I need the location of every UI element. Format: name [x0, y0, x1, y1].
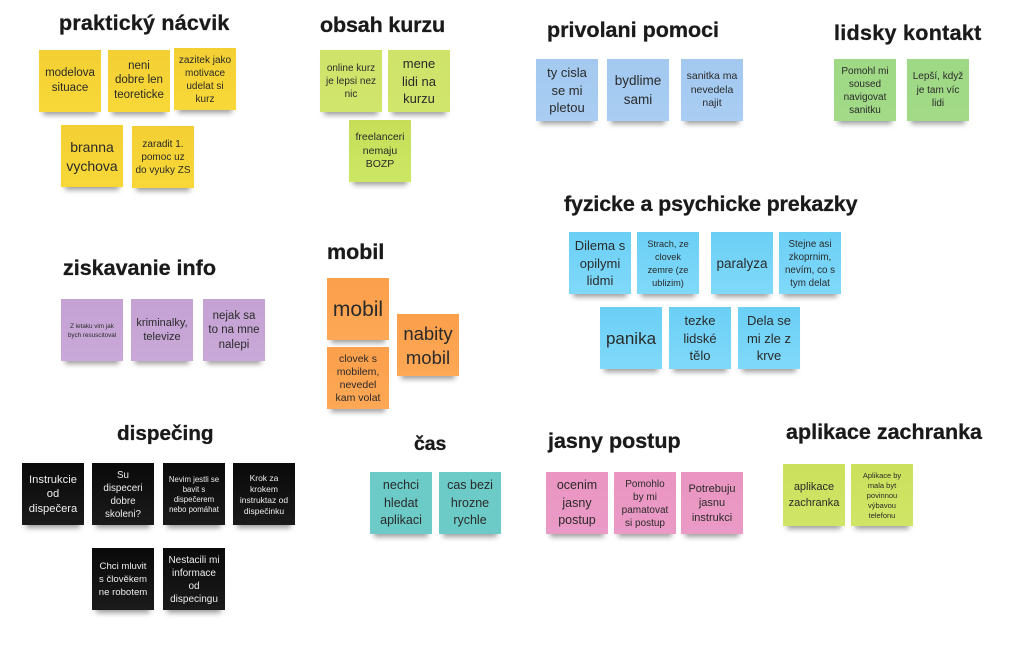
note: Strach, ze clovek zemre: Strach, ze: [647, 238, 689, 248]
note: Krok za krokem: dispečinku: [244, 506, 284, 516]
note: Instrukcie od dispečera: od: [47, 488, 59, 500]
note: Z letaku vim jak: Z letaku vim jak: [70, 322, 114, 330]
note: online kurz: nic: [345, 89, 357, 100]
note: Dilema s opilymi lidmi: [569, 232, 631, 294]
note: ocenim jasny postup: [546, 472, 608, 534]
note: mobil: [327, 278, 389, 340]
note: Pomohlo by mi pamatovat: [614, 472, 676, 534]
note: aplikace zachranka: [783, 464, 845, 526]
note: mene lidi na kurzu: lidi na: [402, 74, 436, 89]
note: panika: panika: [606, 328, 656, 348]
note: Pomohl mi soused: navigovat: [844, 92, 886, 102]
note: kriminalky, televize: televize: [143, 330, 181, 342]
note: Dela se mi zle z krve: mi zle z: [747, 331, 791, 346]
note: Stejne asi zkoprnim: tym delat: [790, 278, 830, 288]
note: Potrebuju jasnu instrukci: [681, 472, 743, 534]
note: Dela se mi zle z krve: krve: [757, 348, 781, 363]
note: modelova situace: situace: [52, 82, 88, 94]
title: privolani pomoci: privolani pomoci: [547, 18, 719, 42]
note: Pomohlo by mi pamatovat: si postup: [625, 518, 665, 528]
note: Strach, ze clovek zemre: [637, 232, 699, 294]
note: Nestacili mi informace: informace: [172, 568, 216, 578]
note: tezke lidské tělo: lidské: [683, 331, 717, 346]
note: Pomohlo by mi pamatovat: by mi: [633, 492, 657, 502]
note: sanitka ma nevedela najit: najit: [702, 97, 722, 109]
note: nabity mobil: mobil: [406, 346, 450, 368]
note: bydlime sami: sami: [624, 92, 652, 106]
note: ty cisla se mi pletou: se mi: [551, 83, 583, 98]
note: cas bezi hrozne rychle: rychle: [453, 513, 487, 527]
title: fyzicke a psychicke prekazky: fyzicke a psychicke prekazky: [564, 192, 857, 216]
note: Potrebuju jasnu instrukci: instrukci: [692, 512, 732, 524]
note: zazitek jako motivace: [174, 48, 236, 110]
note: nabity mobil: nabity: [403, 322, 453, 344]
note: modelova situace: modelova: [45, 67, 95, 79]
note: Su dispeceri dobre skoleni?: [92, 463, 154, 525]
note: modelova situace: [39, 50, 101, 112]
note: Dela se mi zle z krve: Dela se: [747, 313, 791, 328]
note: branna vychova: branna: [70, 138, 114, 154]
note: Potrebuju jasnu instrukci: jasnu: [699, 497, 725, 509]
note: Nevim jestli se bavit: dispečerem: [174, 494, 214, 504]
note: sanitka ma nevedela najit: [681, 59, 743, 121]
note: Lepší, když je tam víc lidi: lidi: [932, 98, 944, 109]
note: Dela se mi zle z krve: [738, 307, 800, 369]
note: Pomohlo by mi pamatovat: pamatovat: [622, 504, 668, 516]
note: clovek s mobilem: [327, 347, 389, 409]
note: kriminalky, televize: [131, 299, 193, 361]
note: freelanceri nemaju BOZP: BOZP: [366, 158, 394, 170]
note: Pomohlo by mi pamatovat: Pomohlo: [625, 478, 665, 490]
note: branna vychova: vychova: [66, 158, 118, 174]
note: Su dispeceri dobre skoleni?: skoleni?: [105, 508, 141, 520]
note: Nevim jestli se bavit: nebo pomáhat: [169, 504, 219, 514]
note: Chci mluvit s člověkem: Chci mluvit: [100, 561, 146, 572]
note: branna vychova: [61, 125, 123, 187]
note: Krok za krokem: Krok za: [250, 472, 278, 482]
note: Instrukcie od dispečera: [22, 463, 84, 525]
note: ocenim jasny postup: postup: [558, 513, 596, 527]
note: nabity mobil: [397, 314, 459, 376]
note: Nestacili mi informace: [163, 548, 225, 610]
title: čas: čas: [414, 433, 446, 455]
title: dispečing: dispečing: [117, 422, 214, 445]
note: Nestacili mi informace: dispecingu: [170, 594, 218, 604]
note: mene lidi na kurzu: kurzu: [403, 91, 435, 106]
note: Chci mluvit s člověkem: ne robotem: [99, 587, 147, 598]
note: Lepší, když je tam víc lidi: je tam víc: [917, 85, 959, 96]
note: Dilema s opilymi lidmi: Dilema s: [575, 238, 625, 253]
note: Stejne asi zkoprnim: [779, 232, 841, 294]
note: ty cisla se mi pletou: pletou: [549, 100, 585, 115]
note: tezke lidské tělo: [669, 307, 731, 369]
note: Nevim jestli se bavit: Nevim jestli se: [169, 474, 219, 484]
note: Aplikace by mala byt: Aplikace by: [863, 470, 901, 480]
note: Strach, ze clovek zemre: ublizim): [652, 278, 684, 288]
note: zaradit 1. pomoc: [132, 126, 194, 188]
note: ty cisla se mi pletou: [536, 59, 598, 121]
note: kriminalky, televize: kriminalky,: [136, 317, 188, 329]
note: Z letaku vim jak: [61, 299, 123, 361]
note: cas bezi hrozne rychle: [439, 472, 501, 534]
note: ocenim jasny postup: ocenim: [557, 478, 597, 492]
note: nechci hledat aplikaci: aplikaci: [380, 513, 422, 527]
note: tezke lidské tělo: tělo: [690, 348, 710, 363]
note: Pomohl mi soused: soused: [849, 78, 881, 90]
note: zazitek jako motivace: zazitek jako: [179, 54, 231, 66]
note: Strach, ze clovek zemre: zemre (ze: [648, 264, 688, 274]
note: nechci hledat aplikaci: nechci: [383, 478, 419, 492]
note: Instrukcie od dispečera: Instrukcie: [29, 474, 77, 486]
note: Aplikace by mala byt: mala byt: [868, 480, 896, 490]
note: Su dispeceri dobre skoleni?: dispeceri: [103, 482, 143, 494]
note: freelanceri nemaju BOZP: [349, 120, 411, 182]
note: sanitka ma nevedela najit: nevedela: [691, 84, 733, 96]
note: Instrukcie od dispečera: dispečera: [29, 503, 77, 515]
note: Pomohl mi soused: [834, 59, 896, 121]
note: freelanceri nemaju BOZP: nemaju: [363, 145, 397, 157]
note: mobil: mobil: [333, 298, 383, 320]
note: Krok za krokem: instruktaz od: [240, 494, 288, 504]
note: Nestacili mi informace: od: [188, 580, 200, 592]
note: online kurz: [320, 50, 382, 112]
note: neni dobre len teoreticke: [108, 50, 170, 112]
note: nechci hledat aplikaci: hledat: [384, 496, 418, 510]
note: clovek s mobilem: clovek s: [339, 352, 377, 364]
note: zazitek jako motivace: motivace: [185, 68, 225, 78]
note: neni dobre len teoreticke: teoreticke: [114, 89, 164, 101]
note: Potrebuju jasnu instrukci: Potrebuju: [688, 483, 736, 495]
note: zaradit 1. pomoc: do vyuky ZS: [135, 165, 191, 176]
note: paralyza: paralyza: [716, 256, 768, 270]
note: nejak sa to na mne nalepi: to na mne: [208, 324, 260, 336]
note: nejak sa to na mne nalepi: nalepi: [219, 339, 249, 351]
note: Strach, ze clovek zemre: clovek: [655, 252, 681, 262]
title: aplikace zachranka: aplikace zachranka: [786, 420, 982, 444]
note: Lepší, když je tam víc lidi: [907, 59, 969, 121]
note: zazitek jako motivace: kurz: [196, 94, 214, 104]
note: ty cisla se mi pletou: ty cisla: [547, 65, 587, 80]
note: cas bezi hrozne rychle: cas bezi: [447, 478, 493, 492]
note: aplikace zachranka: aplikace: [794, 481, 834, 493]
note: Z letaku vim jak: bych resuscitoval: [68, 332, 116, 338]
note: zazitek jako motivace: udelat si: [186, 80, 224, 92]
note: Lepší, když je tam víc lidi: Lepší, když: [913, 71, 963, 82]
note: panika: [600, 307, 662, 369]
note: Aplikace by mala byt: telefonu: [869, 510, 895, 520]
title: mobil: mobil: [327, 240, 384, 264]
note: bydlime sami: [607, 59, 669, 121]
note: zaradit 1. pomoc: pomoc uz: [141, 152, 185, 163]
note: paralyza: [711, 232, 773, 294]
note: Stejne asi zkoprnim: nevím, co s: [785, 264, 835, 276]
title: lidsky kontakt: lidsky kontakt: [834, 21, 982, 45]
note: aplikace zachranka: zachranka: [789, 496, 839, 508]
note: Stejne asi zkoprnim: Stejne asi: [788, 238, 832, 250]
note: Aplikace by mala byt: [851, 464, 913, 526]
note: nechci hledat aplikaci: [370, 472, 432, 534]
note: Pomohl mi soused: sanitku: [849, 104, 881, 116]
note: nejak sa to na mne nalepi: nejak sa: [213, 310, 255, 322]
note: Nestacili mi informace: Nestacili mi: [168, 554, 220, 566]
note: sanitka ma nevedela najit: sanitka ma: [687, 70, 737, 82]
note: online kurz: je lepsi nez: [326, 76, 376, 87]
note: ocenim jasny postup: jasny: [562, 496, 592, 510]
title: obsah kurzu: obsah kurzu: [320, 13, 445, 37]
note: mene lidi na kurzu: [388, 50, 450, 112]
note: Chci mluvit s člověkem: s člověkem: [99, 574, 147, 585]
note: clovek s mobilem: mobilem,: [337, 366, 379, 378]
title: praktický nácvik: praktický nácvik: [59, 11, 230, 35]
note: Chci mluvit s člověkem: [92, 548, 154, 610]
note: zaradit 1. pomoc: zaradit 1.: [142, 139, 184, 150]
note: Su dispeceri dobre skoleni?: dobre: [110, 496, 136, 506]
note: Stejne asi zkoprnim: zkoprnim,: [789, 252, 831, 262]
note: clovek s mobilem: nevedel: [340, 378, 376, 390]
note: Dilema s opilymi lidmi: lidmi: [587, 273, 613, 288]
note: Aplikace by mala byt: povinnou: [867, 490, 897, 500]
note: Aplikace by mala byt: výbavou: [868, 500, 896, 510]
note: cas bezi hrozne rychle: hrozne: [451, 496, 489, 510]
title: jasny postup: jasny postup: [548, 429, 681, 453]
note: Su dispeceri dobre skoleni?: Su: [117, 470, 129, 480]
note: freelanceri nemaju BOZP: freelanceri: [355, 131, 405, 143]
note: nejak sa to na mne nalepi: [203, 299, 265, 361]
note: Nevim jestli se bavit: bavit s: [183, 484, 205, 494]
note: neni dobre len teoreticke: dobre len: [115, 74, 163, 86]
note: Dilema s opilymi lidmi: opilymi: [580, 256, 620, 271]
note: mene lidi na kurzu: mene: [403, 56, 435, 71]
title: ziskavanie info: ziskavanie info: [63, 256, 216, 280]
note: bydlime sami: bydlime: [615, 73, 661, 88]
note: online kurz: online kurz: [327, 63, 375, 74]
note: Pomohl mi soused: Pomohl mi: [841, 66, 889, 76]
note: neni dobre len teoreticke: neni: [128, 60, 150, 72]
note: Krok za krokem: krokem: [250, 484, 278, 494]
note: clovek s mobilem: kam volat: [336, 392, 380, 404]
note: tezke lidské tělo: tezke: [684, 313, 716, 328]
note: Nevim jestli se bavit: [163, 463, 225, 525]
note: Krok za krokem: [233, 463, 295, 525]
